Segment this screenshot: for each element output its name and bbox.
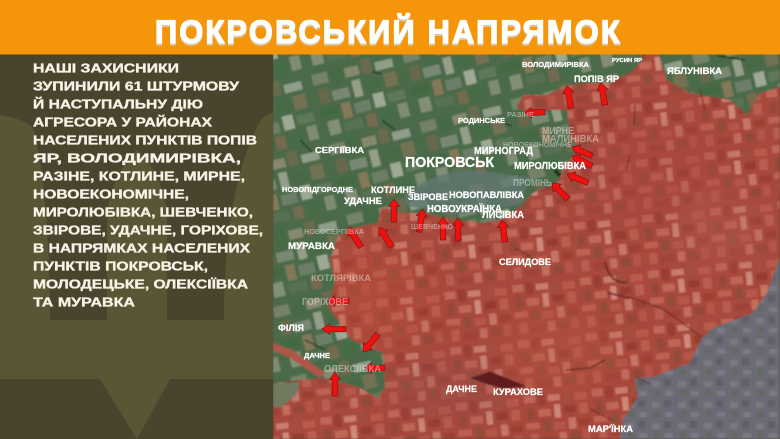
panel text: МИРОЛЮБІВКА, ШЕВЧЕНКО, <box>33 206 253 220</box>
grey territory <box>620 257 780 439</box>
panel text: НАШІ ЗАХИСНИКИ <box>33 62 179 76</box>
panel text: НОВОЕКОНОМІЧНЕ, <box>33 188 189 202</box>
settlement labels: ПОКРОВСЬК <box>405 154 495 171</box>
green territory <box>273 50 780 439</box>
occupied territory <box>273 50 780 439</box>
settlement labels: ДАЧНЕ <box>304 353 330 360</box>
settlement labels: ПОПІВ ЯР <box>574 74 619 84</box>
settlement labels: МУРАВКА <box>288 241 335 252</box>
left text panel <box>0 54 273 439</box>
tonal variation in occupied territory <box>315 120 765 420</box>
settlement labels: НОВОСЕРГІЇВКА <box>304 227 365 236</box>
settlement labels: ФІЛІЯ <box>278 323 304 333</box>
settlement labels: РОДИНСЬКЕ <box>458 116 505 125</box>
panel text: НАСЕЛЕНИХ ПУНКТІВ ПОПІВ <box>33 134 257 148</box>
settlement labels: ГОРІХОВЕ <box>302 297 348 308</box>
settlement labels: ВОЛОДИМИРІВКА <box>522 60 590 69</box>
settlement labels: МАЛИНІВКА <box>542 134 599 145</box>
front-line arrows <box>322 82 610 396</box>
panel text: МОЛОДЕЦЬКЕ, ОЛЕКСІЇВКА <box>33 276 248 292</box>
settlement labels: ПРОМІНЬ <box>513 178 552 189</box>
panel text: АГРЕСОРА У РАЙОНАХ <box>33 114 213 130</box>
settlement labels: КОТЛИНЕ <box>371 185 415 196</box>
settlement labels: НОВОПАВЛІВКА <box>449 190 524 201</box>
map panel <box>273 50 780 439</box>
panel text: ЯР, ВОЛОДИМИРІВКА, <box>33 152 241 166</box>
title: ПОКРОВСЬКИЙ НАПРЯМОК <box>155 13 620 50</box>
settlement labels: ЯБЛУНІВКА <box>667 66 722 77</box>
title: ПОКРОВСЬКИЙ НАПРЯМОК <box>155 15 620 52</box>
orange title band <box>0 0 780 54</box>
reservoir and rivers <box>472 90 705 420</box>
settlement labels: НОВОУКРАЇНКА <box>427 202 502 215</box>
Pokrovsk urban area <box>405 171 530 215</box>
settlement labels: СЕРГІЇВКА <box>315 145 364 155</box>
panel text: ТА МУРАВКА <box>33 296 135 310</box>
settlement labels: СЕЛИДОВЕ <box>499 257 551 267</box>
settlement labels: НОВОПІДГОРОДНЕ <box>282 185 353 194</box>
settlement labels: МИРОЛЮБІВКА <box>514 161 586 172</box>
settlement labels: НОВОЕКОНОМІЧНЕ <box>503 140 572 149</box>
green patch near lower left <box>273 382 300 408</box>
settlement labels: РУСИН ЯР <box>612 58 642 64</box>
panel text: ЗВІРОВЕ, УДАЧНЕ, ГОРІХОВЕ, <box>33 224 263 238</box>
emblem: trident watermark <box>0 112 273 439</box>
settlement labels: КУРАХОВЕ <box>493 387 543 398</box>
settlement labels: ЛИСІВКА <box>482 210 524 221</box>
settlement labels: МИРНЕ <box>542 126 574 137</box>
settlement labels: ДАЧНЕ <box>446 384 477 395</box>
settlement labels: ОЛЕКСІЇВКА <box>324 362 381 375</box>
panel text: В НАПРЯМКАХ НАСЕЛЕНИХ <box>33 242 251 256</box>
panel text: РАЗІНЕ, КОТЛИНЕ, МИРНЕ, <box>33 170 245 184</box>
settlement labels: РАЗІНЕ <box>507 110 534 119</box>
settlement labels: МИРНОГРАД <box>474 146 533 157</box>
panel text <box>33 62 263 310</box>
panel text: ЗУПИНИЛИ 61 ШТУРМОВУ <box>33 80 239 94</box>
panel text: ПУНКТІВ ПОКРОВСЬК, <box>33 260 208 274</box>
road strip near Dachne <box>273 343 325 378</box>
settlement labels: УДАЧНЕ <box>344 196 382 207</box>
settlement labels: КОТЛЯРІВКА <box>311 273 371 284</box>
settlement labels: ЗВІРОВЕ <box>408 192 448 202</box>
settlement labels <box>278 58 722 435</box>
panel text: Й НАСТУПАЛЬНУ ДІЮ <box>33 96 203 112</box>
settlement labels: МАР'ЇНКА <box>588 424 633 435</box>
settlement labels: ШЕВЧЕНКО <box>411 222 453 231</box>
